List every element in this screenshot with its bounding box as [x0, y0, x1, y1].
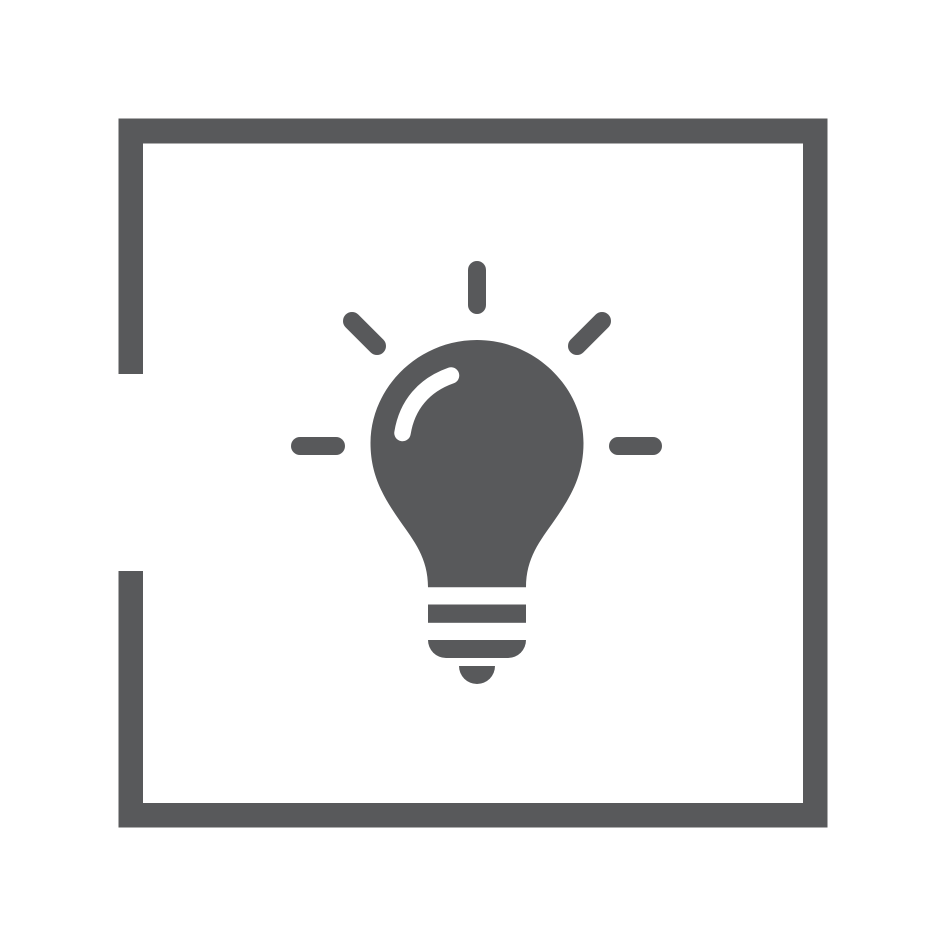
- bulb base stripe 2: [428, 640, 526, 658]
- ray upper left: [352, 321, 377, 346]
- ray top: [468, 270, 486, 305]
- open square frame: [118, 118, 828, 828]
- icon: light rays: [300, 270, 653, 446]
- bulb glass: [370, 340, 584, 587]
- ray upper right: [577, 321, 602, 346]
- bulb tip: [459, 666, 495, 684]
- ray left: [300, 437, 336, 455]
- bulb base stripe 1: [428, 604, 526, 623]
- bulb highlight: [402, 376, 451, 433]
- ray right: [618, 437, 653, 455]
- icon: light bulb: [370, 340, 584, 684]
